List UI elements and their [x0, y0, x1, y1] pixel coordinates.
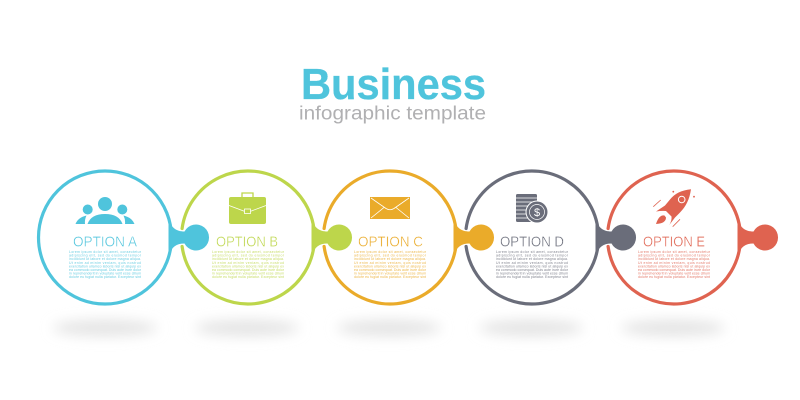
- option E body text: adipiscing elit, sed do eiusmod tempor: [638, 254, 711, 258]
- ring B: [182, 171, 314, 304]
- option A body text: adipiscing elit, sed do eiusmod tempor: [69, 254, 142, 258]
- option D body text: dolore eu fugiat nulla pariatur. Excepteur sint: [496, 275, 568, 279]
- connector nub B: [312, 218, 352, 256]
- panel: option A: [38, 171, 209, 304]
- option E body text: Lorem ipsum dolor sit amet, consectetur: [638, 250, 711, 254]
- panel: option E: [608, 171, 778, 304]
- ground shadows: [53, 320, 725, 336]
- option D body text: adipiscing elit, sed do eiusmod tempor: [496, 254, 569, 258]
- option C body text: Lorem ipsum dolor sit amet, consectetur: [354, 250, 427, 254]
- option A body text: Ut enim ad minim veniam, quis nostrud: [69, 261, 141, 265]
- icon: people: [76, 197, 134, 224]
- ring D: [466, 171, 598, 304]
- option E body text: Ut enim ad minim veniam, quis nostrud: [638, 261, 710, 265]
- option C body text: ea commodo consequat. Duis aute irure dolor: [354, 268, 427, 272]
- option A body text: incididunt ut labore et dolore magna aliqua.: [69, 257, 141, 261]
- option A body text: ea commodo consequat. Duis aute irure dolor: [69, 268, 142, 272]
- option E body text: in reprehenderit in voluptate velit esse cillum: [638, 272, 710, 276]
- ring E: [608, 171, 740, 304]
- option E body text: dolore eu fugiat nulla pariatur. Excepteur sint: [638, 275, 710, 279]
- ring C: [324, 171, 456, 304]
- option B body text: in reprehenderit in voluptate velit esse cillum: [212, 272, 284, 276]
- title: Business: [301, 60, 486, 109]
- panel: option D: [466, 171, 636, 304]
- option D body text: Lorem ipsum dolor sit amet, consectetur: [496, 250, 569, 254]
- option D body text: ea commodo consequat. Duis aute irure dolor: [496, 268, 569, 272]
- option E body text: incididunt ut labore et dolore magna aliqua.: [638, 257, 710, 261]
- option B body text: exercitation ullamco laboris nisi ut aliquip ex: [212, 264, 284, 268]
- option B body text: incididunt ut labore et dolore magna aliqua.: [212, 257, 284, 261]
- option A body text: [69, 250, 142, 279]
- option E body text: [638, 250, 711, 279]
- option A label: OPTION A: [73, 234, 137, 250]
- option C body text: Ut enim ad minim veniam, quis nostrud: [354, 261, 426, 265]
- option D body text: Ut enim ad minim veniam, quis nostrud: [496, 261, 568, 265]
- option C body text: [354, 250, 427, 279]
- option B body text: Ut enim ad minim veniam, quis nostrud: [212, 261, 284, 265]
- option E label: OPTION E: [643, 234, 705, 250]
- option B body text: dolore eu fugiat nulla pariatur. Excepteur sint: [212, 275, 284, 279]
- option C body text: in reprehenderit in voluptate velit esse cillum: [354, 272, 426, 276]
- panel: option B: [182, 171, 352, 304]
- icon: coins: [516, 194, 548, 224]
- option C body text: dolore eu fugiat nulla pariatur. Excepteur sint: [354, 275, 426, 279]
- connector nub D: [596, 218, 636, 256]
- option A body text: dolore eu fugiat nulla pariatur. Excepteur sint: [69, 275, 141, 279]
- option D body text: [496, 250, 569, 279]
- option B body text: ea commodo consequat. Duis aute irure dolor: [212, 268, 285, 272]
- option A body text: in reprehenderit in voluptate velit esse cillum: [69, 272, 141, 276]
- option C body text: adipiscing elit, sed do eiusmod tempor: [354, 254, 427, 258]
- option D body text: incididunt ut labore et dolore magna aliqua.: [496, 257, 568, 261]
- panel: option C: [324, 171, 494, 304]
- option C label: OPTION C: [358, 234, 423, 250]
- option D body text: in reprehenderit in voluptate velit esse cillum: [496, 272, 568, 276]
- option D label: OPTION D: [500, 234, 564, 250]
- connector nub C: [454, 218, 494, 256]
- option B body text: Lorem ipsum dolor sit amet, consectetur: [212, 250, 285, 254]
- option E body text: ea commodo consequat. Duis aute irure dolor: [638, 268, 711, 272]
- icon: rocket: [653, 189, 695, 227]
- connector nub A: [168, 218, 209, 256]
- connector nub E: [738, 218, 778, 256]
- option A body text: Lorem ipsum dolor sit amet, consectetur: [69, 250, 142, 254]
- ring A: [38, 171, 172, 304]
- option B body text: adipiscing elit, sed do eiusmod tempor: [212, 254, 285, 258]
- option C body text: exercitation ullamco laboris nisi ut aliquip ex: [354, 264, 426, 268]
- icon: briefcase: [229, 193, 266, 224]
- icon: coins: $: [534, 207, 540, 219]
- subtitle: infographic template: [299, 104, 486, 124]
- option C body text: incididunt ut labore et dolore magna aliqua.: [354, 257, 426, 261]
- option D body text: exercitation ullamco laboris nisi ut aliquip ex: [496, 264, 568, 268]
- option B body text: [212, 250, 285, 279]
- option A body text: exercitation ullamco laboris nisi ut aliquip ex: [69, 264, 141, 268]
- icon: envelope: [370, 197, 410, 219]
- option E body text: exercitation ullamco laboris nisi ut aliquip ex: [638, 264, 710, 268]
- option B label: OPTION B: [216, 234, 278, 250]
